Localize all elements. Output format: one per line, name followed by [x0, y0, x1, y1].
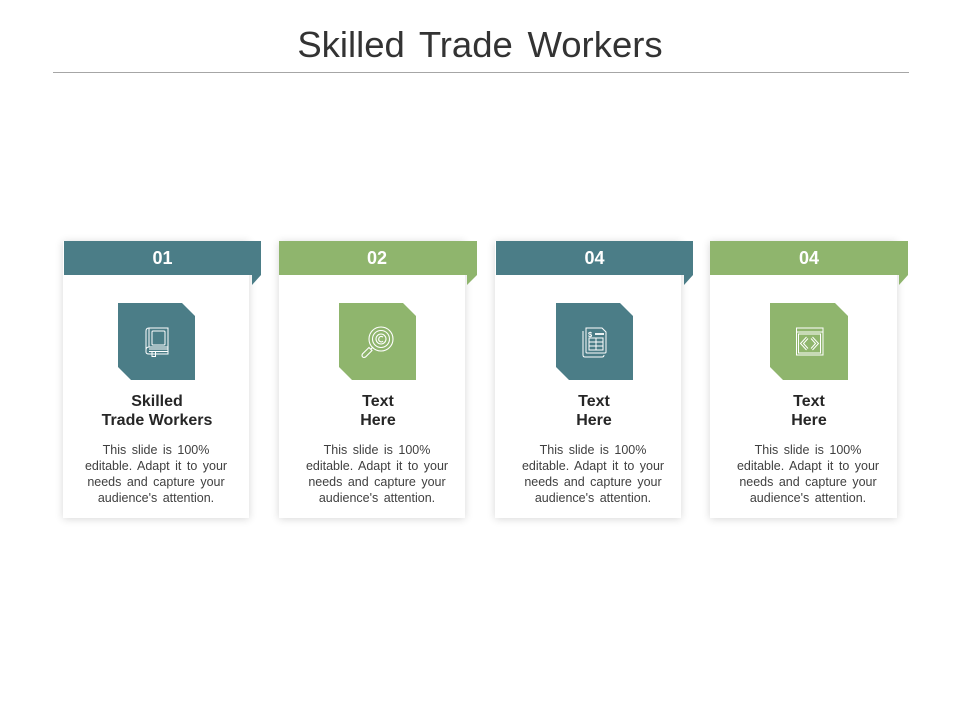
body text: editable. Adapt it to your — [522, 459, 664, 473]
heading — [360, 393, 396, 429]
body text: This slide is 100% — [755, 443, 861, 457]
body text: audience's attention. — [535, 491, 651, 505]
banner 03 — [496, 241, 693, 285]
dollar sign: $ — [588, 330, 593, 339]
heading: Here — [576, 412, 612, 429]
number 01: 01 — [152, 248, 173, 268]
heading: Here — [360, 412, 396, 429]
icon: invoice — [556, 303, 633, 380]
heading: Text — [362, 393, 394, 410]
banner 01 — [64, 241, 261, 285]
banner 04 — [710, 241, 908, 285]
body text — [522, 443, 664, 505]
body text: This slide is 100% — [103, 443, 209, 457]
heading: Skilled — [131, 393, 183, 410]
banner 02 — [279, 241, 477, 285]
body text: needs and capture your — [308, 475, 446, 489]
body text: editable. Adapt it to your — [306, 459, 448, 473]
body text: audience's attention. — [98, 491, 214, 505]
panel: card 02 — [276, 238, 477, 522]
heading: Trade Workers — [102, 412, 212, 429]
icon: book — [118, 303, 195, 380]
heading: Here — [791, 412, 827, 429]
body text: This slide is 100% — [540, 443, 646, 457]
body text: audience's attention. — [750, 491, 866, 505]
body text: This slide is 100% — [324, 443, 430, 457]
body text — [306, 443, 448, 505]
number 04: 04 — [799, 248, 819, 268]
heading: Text — [793, 393, 825, 410]
heading — [576, 393, 612, 429]
body text: editable. Adapt it to your — [85, 459, 227, 473]
body text: needs and capture your — [87, 475, 225, 489]
icon: magnifier — [339, 303, 416, 380]
body text — [85, 443, 227, 505]
number 02: 02 — [367, 248, 387, 268]
body text — [737, 443, 879, 505]
panel: card 03 — [492, 238, 693, 522]
icon: code window — [770, 303, 848, 380]
body text: audience's attention. — [319, 491, 435, 505]
panel: card 04 — [706, 238, 908, 522]
title: Skilled Trade Workers — [297, 24, 663, 65]
panel: card 01 — [60, 238, 261, 522]
body text: needs and capture your — [739, 475, 877, 489]
body text: editable. Adapt it to your — [737, 459, 879, 473]
body text: needs and capture your — [524, 475, 662, 489]
heading: Text — [578, 393, 610, 410]
heading — [791, 393, 827, 429]
heading — [102, 393, 212, 429]
number 03: 04 — [584, 248, 605, 268]
